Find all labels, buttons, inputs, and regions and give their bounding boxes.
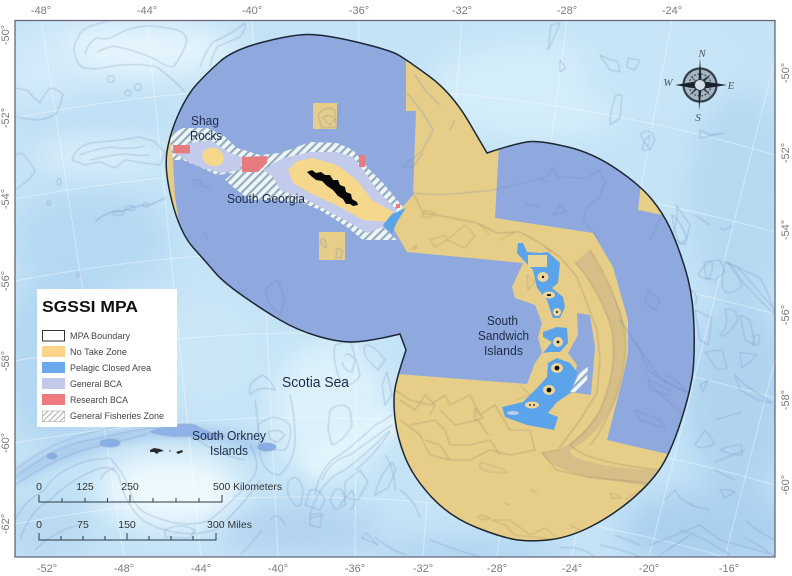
label: Islands (Orkney): Islands [210, 443, 248, 458]
label: South Orkney: South Orkney [192, 428, 266, 443]
axis labels: top: -44° [137, 5, 157, 17]
axis labels: bottom: -32° [413, 563, 433, 575]
axis labels: bottom: -48° [114, 563, 134, 575]
axis labels: right: -58° [780, 390, 792, 410]
label: South (Sandwich): South [487, 313, 518, 328]
zone: pelagic closed area [383, 208, 577, 430]
scale bar: miles: 75 [77, 519, 89, 531]
MPA boundary [166, 34, 694, 541]
axis labels: top: -40° [242, 5, 262, 17]
zone: SE fisheries hatch [570, 367, 588, 392]
zone: general BCA [175, 140, 397, 233]
axis labels: bottom: -28° [487, 563, 507, 575]
label: Rocks: Rocks [190, 128, 222, 143]
contours inside MPA [185, 75, 692, 540]
axis labels: left: -50° [0, 25, 12, 45]
axis labels: bottom: -20° [639, 563, 659, 575]
scale bar: kilometers: 250 [121, 481, 139, 493]
axis labels: right: -56° [780, 305, 792, 325]
legend text: pelagic closed area: Pelagic Closed Area [70, 363, 152, 374]
compass rose: E [727, 80, 735, 92]
scale bar: miles: 300 Miles [207, 519, 252, 531]
axis labels: bottom: -40° [268, 563, 288, 575]
axis labels: bottom [37, 563, 739, 575]
compass rose: N [697, 48, 706, 60]
zone: general MPA ocean [173, 35, 694, 454]
scale bar: miles: 150 [118, 519, 136, 531]
axis labels: right: -52° [780, 143, 792, 163]
scale bar: miles: 0 [36, 519, 42, 531]
axis labels: left [0, 25, 12, 534]
legend text: research BCA: Research BCA [70, 395, 129, 406]
compass rose: S [695, 112, 701, 124]
zone: research BCA [173, 145, 400, 208]
axis labels: top: -32° [452, 5, 472, 17]
label: Shag Rocks: Shag [191, 113, 219, 128]
axis labels: left: -60° [0, 433, 12, 453]
compass rose [663, 48, 735, 124]
scale bar: kilometers [36, 481, 282, 502]
axis labels: top: -48° [31, 5, 51, 17]
label: South Georgia: South Georgia [227, 191, 306, 206]
compass rose: W [663, 77, 673, 89]
axis labels: top [31, 5, 682, 17]
legend swatch: general fisheries zone [42, 411, 64, 422]
legend swatch: general BCA [42, 378, 65, 389]
zone: darker slope band [542, 250, 658, 486]
zone: no take zone patches [150, 103, 668, 260]
axis labels: left: -62° [0, 514, 12, 534]
legend swatch: pelagic closed area [42, 362, 65, 373]
axis labels: bottom: -24° [562, 563, 582, 575]
zone: no take zone main [394, 60, 668, 540]
scale bar: kilometers: 0 [36, 481, 42, 493]
legend panel [37, 289, 177, 427]
place labels [190, 113, 529, 458]
zone: MPA notch in yellow [568, 313, 595, 395]
scale bar: kilometers: 125 [76, 481, 94, 493]
axis labels: right: -60° [780, 475, 792, 495]
axis labels: bottom: -16° [719, 563, 739, 575]
axis labels: right: -50° [780, 63, 792, 83]
axis labels: right: -54° [780, 220, 792, 240]
axis labels: top: -36° [349, 5, 369, 17]
zone: inner no take zones [200, 145, 395, 222]
axis labels: bottom: -52° [37, 563, 57, 575]
island: South Orkney [150, 448, 183, 454]
axis labels: right [780, 63, 792, 495]
axis labels: top: -28° [557, 5, 577, 17]
legend swatch: no take zone [42, 346, 65, 357]
map: MPA zones [166, 35, 694, 540]
legend text: general fisheries zone: General Fisheries Zone [70, 411, 164, 422]
legend swatch: research BCA [42, 394, 65, 405]
label: Sandwich: Sandwich [478, 328, 529, 343]
label: Islands (Sandwich): Islands [484, 343, 523, 358]
axis labels: left: -52° [0, 108, 12, 128]
axis labels: bottom: -44° [191, 563, 211, 575]
label: Scotia Sea: Scotia Sea [282, 374, 350, 391]
right side sea features [672, 215, 732, 280]
scale bar: kilometers: 500 Kilometers [213, 481, 282, 493]
legend text: MPA boundary: MPA Boundary [70, 331, 130, 342]
scale bar: miles [36, 519, 252, 540]
axis labels: left: -56° [0, 271, 12, 291]
legend text: no take zone: No Take Zone [70, 347, 127, 358]
axis labels: bottom: -36° [345, 563, 365, 575]
axis labels: top: -24° [662, 5, 682, 17]
island: South Georgia [307, 170, 358, 206]
zone: fisheries hatch shelf [170, 128, 403, 240]
axis labels: left: -58° [0, 351, 12, 371]
legend swatch: MPA boundary [42, 330, 64, 341]
legend text: general BCA: General BCA [70, 379, 123, 390]
axis labels: left: -54° [0, 189, 12, 209]
legend title: SGSSI MPA [42, 299, 138, 316]
zone: yellow box and island halos [507, 255, 563, 415]
